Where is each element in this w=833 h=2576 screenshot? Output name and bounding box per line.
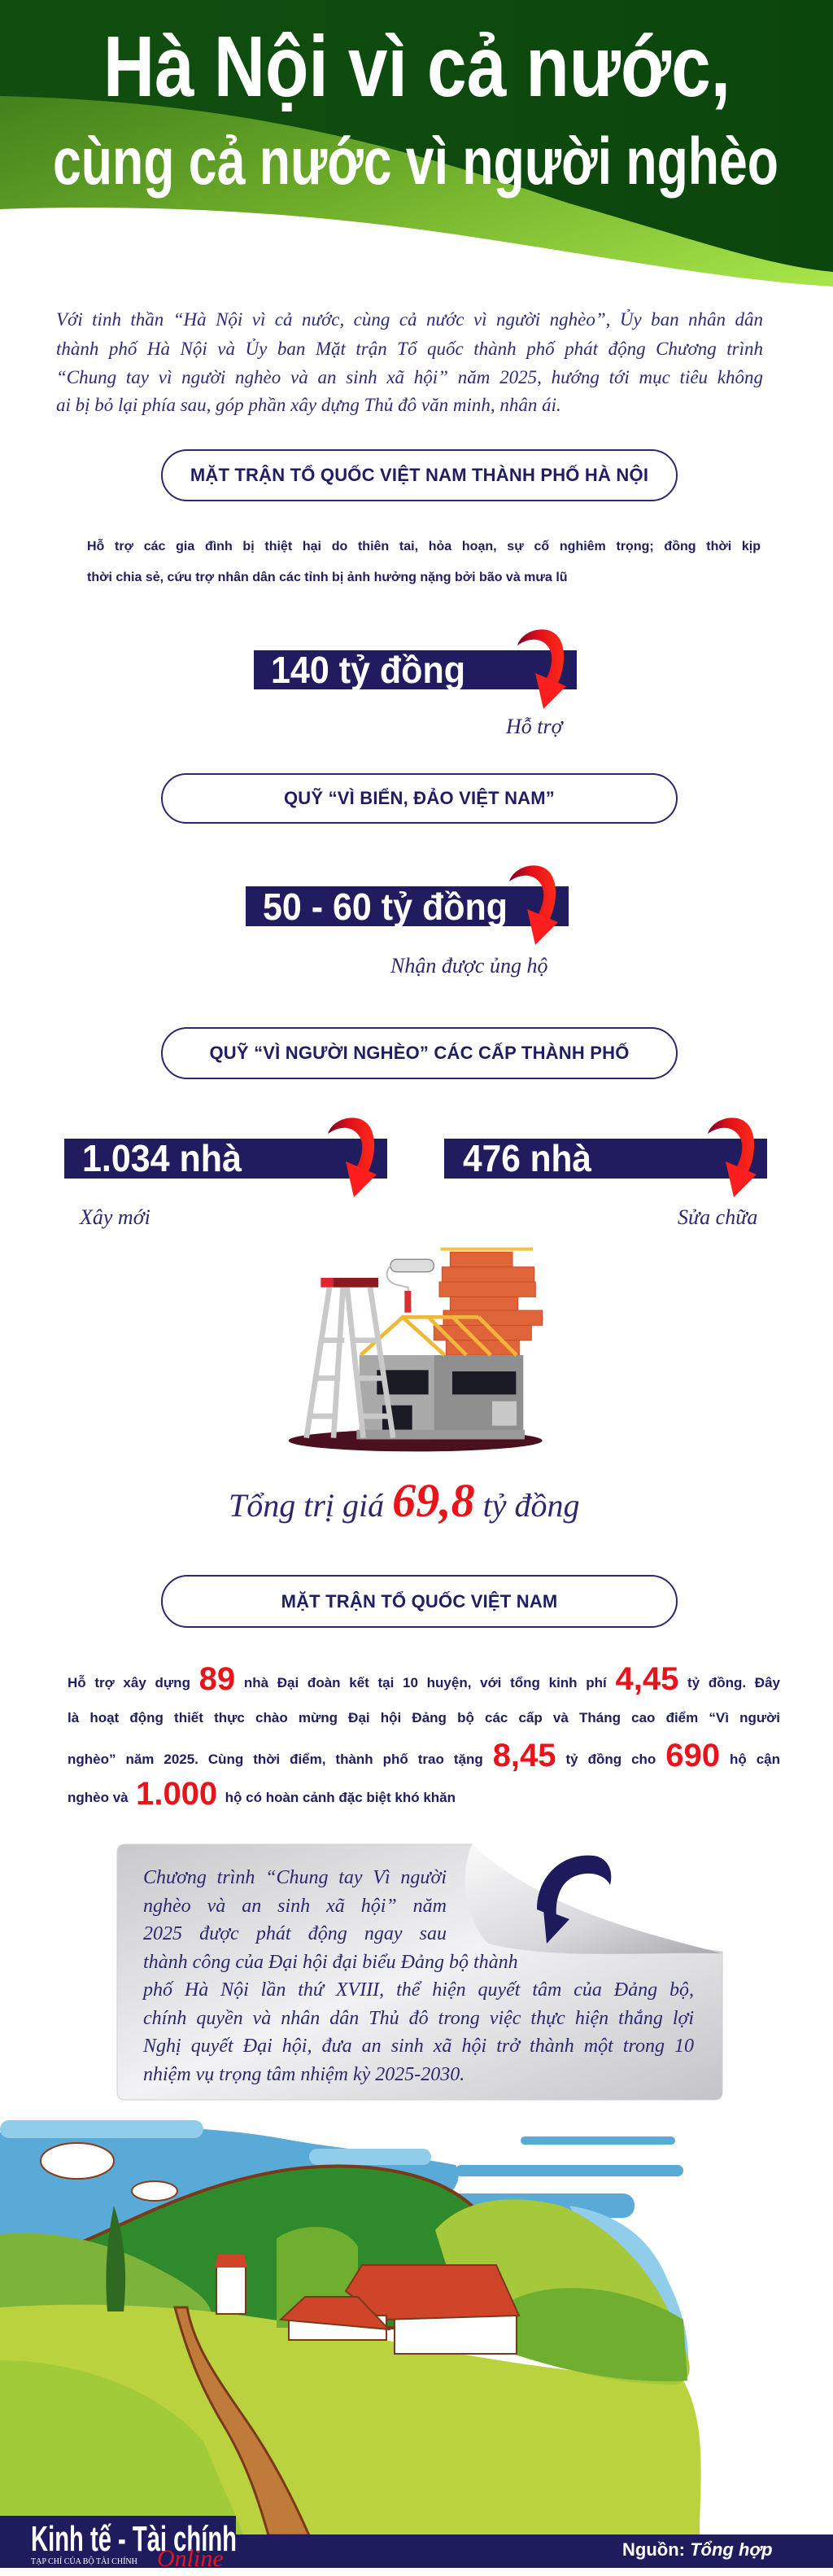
stat bar: 476 nhà bbox=[444, 1117, 767, 1197]
mountain bbox=[81, 2166, 488, 2328]
logo: TẠP CHÍ CỦA BỘ TÀI CHÍNH bbox=[31, 2556, 137, 2566]
tower bbox=[216, 2267, 246, 2314]
stat bar: 140 tỷ đồng: 140 tỷ đồng bbox=[271, 649, 465, 691]
pill: MTTQ Hà Nội bbox=[161, 449, 678, 501]
callout: curled paper note: 2025 được phát động ngay sau bbox=[143, 1923, 447, 1944]
callout: curled paper note bbox=[117, 1844, 722, 2100]
pill: Quỹ vì biển đảo: QUỸ “VÌ BIỂN, ĐẢO VIỆT NAM” bbox=[284, 788, 555, 808]
caption: Nhận được ủng hộ: Nhận được ủng hộ bbox=[390, 954, 547, 977]
stat bar: 50-60 tỷ đồng: 50 - 60 tỷ đồng bbox=[263, 886, 508, 928]
text: support description: thời chia sẻ, cứu trợ nhân dân các tỉnh bị ảnh hưởng nặng bởi bão và mưa lũ bbox=[87, 571, 568, 584]
stat bar: 1.034 nhà: 1.034 nhà bbox=[82, 1137, 242, 1179]
right trees bbox=[435, 2199, 690, 2385]
sky bbox=[0, 2120, 688, 2377]
pill: Quỹ vì người nghèo bbox=[161, 1027, 678, 1079]
source: Nguồn: Tổng hợp bbox=[622, 2539, 773, 2560]
pill: Quỹ vì người nghèo: QUỸ “VÌ NGƯỜI NGHÈO” CÁC CẤP THÀNH PHỐ bbox=[209, 1043, 630, 1063]
text: support description: Hỗ trợ các gia đình bị thiệt hại do thiên tai, hỏa hoạn, sự cố nghiêm trọng; đồng thời kịp bbox=[87, 540, 761, 553]
road bbox=[175, 2307, 309, 2535]
callout: curled paper note: Chương trình “Chung tay Vì người bbox=[143, 1867, 447, 1888]
caption: Hỗ trợ: Hỗ trợ bbox=[506, 715, 563, 738]
intro text: Với tinh thần “Hà Nội vì cả nước, cùng cả nước vì người nghèo”, Ủy ban nhân dân bbox=[56, 309, 763, 330]
callout: curled paper note: nghèo và an sinh xã hội” năm bbox=[143, 1896, 447, 1917]
intro text: “Chung tay vì người nghèo và an sinh xã hội” năm 2025, hướng tới mục tiêu không bbox=[56, 367, 763, 387]
stat bar: 1.034 nhà bbox=[64, 1117, 387, 1197]
intro text: ai bị bỏ lại phía sau, góp phần xây dựng Thủ đô văn minh, nhân ái. bbox=[56, 395, 561, 415]
callout: curled paper note: thành công của Đại hội đại biểu Đảng bộ thành bbox=[143, 1952, 518, 1973]
paragraph with red numbers: Hỗ trợ xây dựng 89 nhà Đại đoàn kết tại 10 huyện, với tổng kinh phí 4,45 tỷ đồng. Đây bbox=[68, 1661, 780, 1697]
houses bbox=[395, 2311, 517, 2354]
intro text bbox=[56, 309, 763, 415]
pill: MTTQ Việt Nam bbox=[161, 1575, 678, 1628]
callout: curled paper note: Nghị quyết Đại hội, đưa an sinh xã hội trở thành một trong 10 bbox=[143, 2036, 694, 2057]
callout: curled paper note: chính quyền và nhân dân Thủ đô trong việc thực hiện thắng lợi bbox=[143, 2008, 694, 2029]
illustration: house construction bbox=[288, 1247, 543, 1452]
field bbox=[0, 2305, 701, 2535]
callout: curled paper note: phố Hà Nội lần thứ XVIII, thể hiện quyết tâm của Đảng bộ, bbox=[143, 1979, 694, 2001]
left hills bbox=[0, 2233, 212, 2328]
paragraph with red numbers: nghèo và 1.000 hộ có hoàn cảnh đặc biệt khó khăn bbox=[68, 1776, 456, 1812]
stat bar: 50-60 tỷ đồng bbox=[246, 865, 569, 945]
footer bar with logo and source bbox=[0, 2516, 833, 2568]
total value: Tổng trị giá 69,8 tỷ đồng bbox=[229, 1474, 580, 1527]
cypress bbox=[106, 2206, 125, 2311]
icon: navy curved arrow bbox=[537, 1856, 611, 1944]
pill: MTTQ Việt Nam: MẶT TRẬN TỔ QUỐC VIỆT NAM bbox=[281, 1590, 557, 1612]
illustration: countryside landscape bbox=[0, 2120, 701, 2534]
stat bar: 476 nhà: 476 nhà bbox=[463, 1137, 591, 1179]
callout: curled paper note: nhiệm vụ trọng tâm nhiệm kỳ 2025-2030. bbox=[143, 2064, 464, 2085]
stat bar: 140 tỷ đồng bbox=[254, 629, 577, 709]
paragraph with red numbers: nghèo” năm 2025. Cùng thời điểm, thành phố trao tặng 8,45 tỷ đồng cho 690 hộ cận bbox=[68, 1738, 780, 1773]
caption: Xây mới: Xây mới bbox=[80, 1205, 150, 1229]
text: support description bbox=[87, 539, 761, 584]
header: green wave with title bbox=[0, 0, 833, 286]
intro text: thành phố Hà Nội và Ủy ban Mặt trận Tổ quốc thành phố phát động Chương trình bbox=[56, 339, 763, 359]
pill: MTTQ Hà Nội: MẶT TRẬN TỔ QUỐC VIỆT NAM THÀNH PHỐ HÀ NỘI bbox=[190, 465, 648, 485]
paragraph with red numbers bbox=[68, 1661, 780, 1812]
caption: Sửa chữa: Sửa chữa bbox=[678, 1205, 757, 1229]
paragraph with red numbers: là hoạt động thiết thực chào mừng Đại hội Đảng bộ các cấp và Tháng cao điểm “Vì người bbox=[68, 1710, 780, 1725]
pill: Quỹ vì biển đảo bbox=[161, 773, 678, 824]
title bbox=[53, 19, 778, 199]
